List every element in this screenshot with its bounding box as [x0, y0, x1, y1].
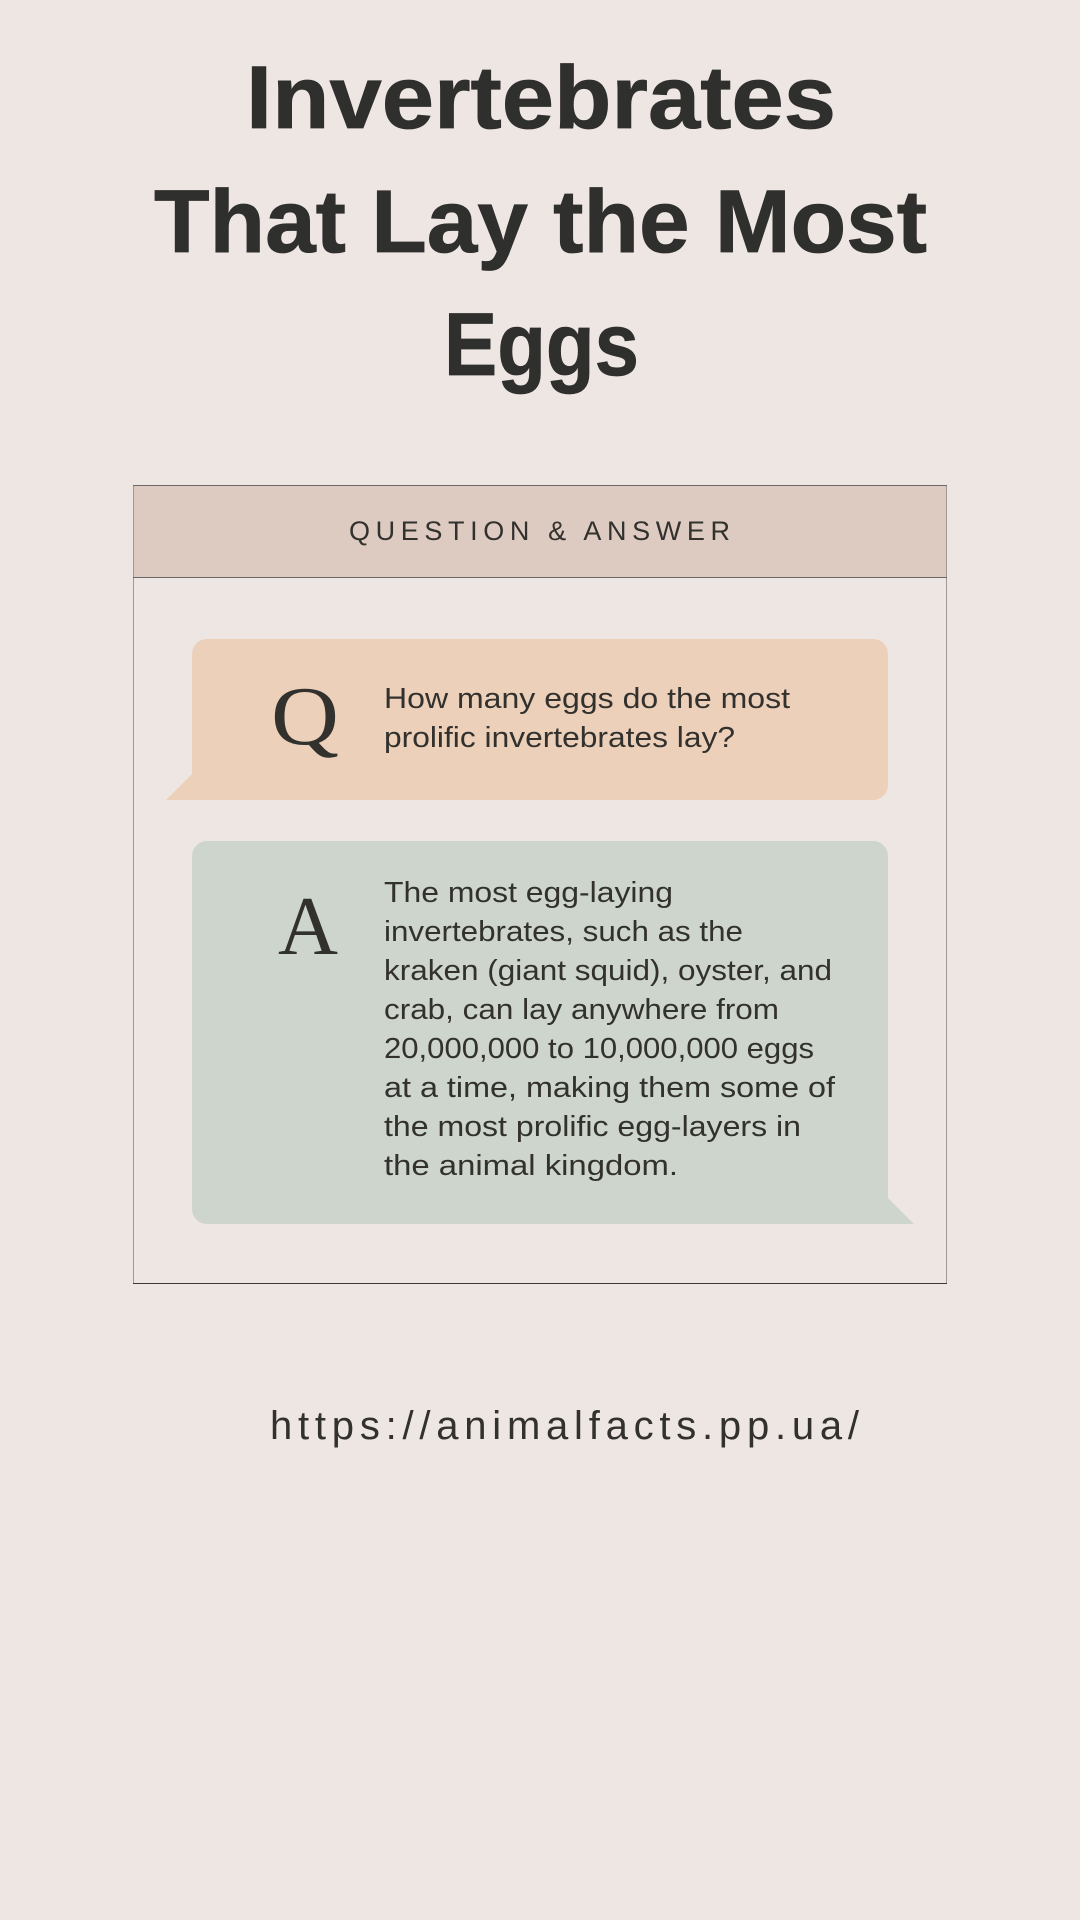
question text: How many eggs do the most: [384, 683, 790, 715]
title: [154, 47, 927, 394]
answer text: [384, 877, 836, 1182]
answer bubble shape: [192, 841, 914, 1224]
letter Q: Q: [271, 670, 339, 763]
answer text: invertebrates, such as the: [384, 916, 743, 948]
answer text: the animal kingdom.: [384, 1150, 678, 1182]
panel header band: [133, 485, 947, 578]
question text: [384, 683, 790, 754]
question bubble: [166, 639, 888, 800]
title: Eggs: [444, 294, 639, 394]
title: That Lay the Most: [154, 171, 927, 271]
answer text: 20,000,000 to 10,000,000 eggs: [384, 1033, 814, 1065]
answer bubble: [192, 841, 914, 1224]
panel: question and answer: [133, 485, 947, 1284]
answer text: at a time, making them some of: [384, 1072, 836, 1104]
answer text: kraken (giant squid), oyster, and: [384, 955, 832, 987]
answer text: The most egg-laying: [384, 877, 673, 909]
letter A: A: [278, 880, 338, 973]
question bubble shape: [166, 639, 888, 800]
title: Invertebrates: [246, 47, 836, 147]
website url: https://animalfacts.pp.ua/: [270, 1404, 860, 1448]
answer text: crab, can lay anywhere from: [384, 994, 779, 1026]
panel frame: [133, 485, 947, 1284]
question text: prolific invertebrates lay?: [384, 722, 735, 754]
panel header band: QUESTION & ANSWER: [349, 516, 730, 546]
answer text: the most prolific egg-layers in: [384, 1111, 801, 1143]
